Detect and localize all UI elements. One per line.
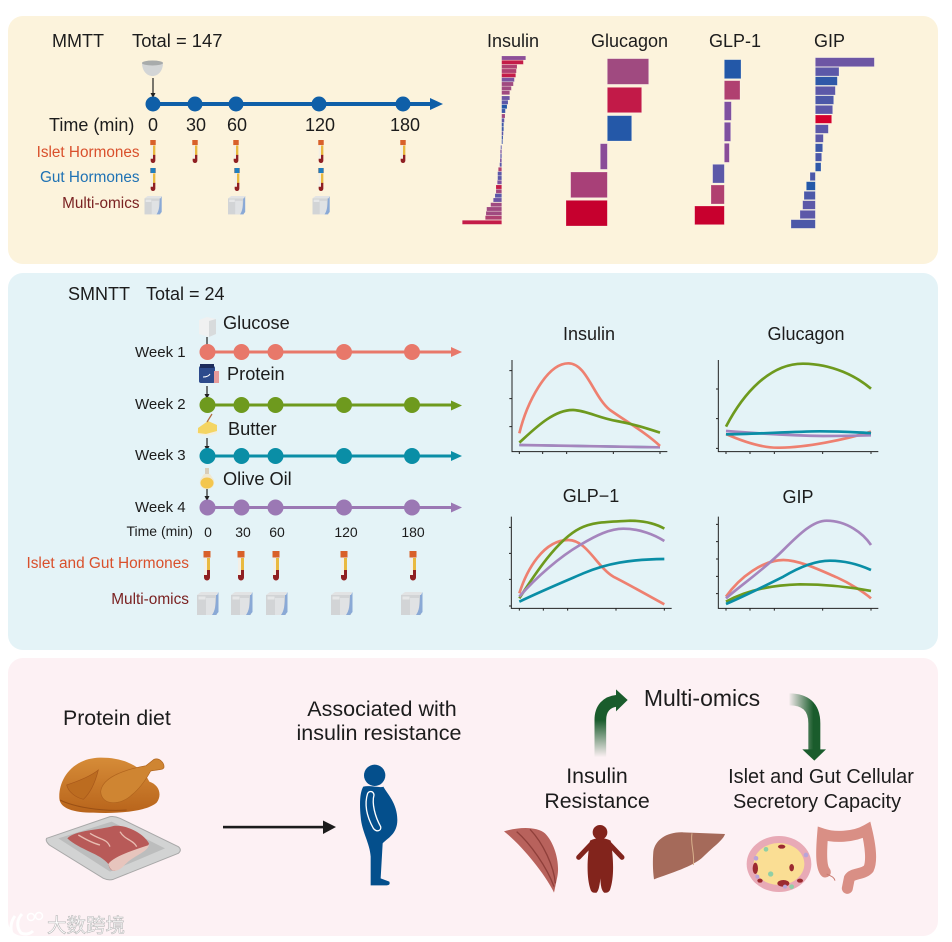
icon: liver [653, 832, 725, 879]
icon: meat tray [46, 817, 180, 880]
icon: meal bowl [142, 60, 163, 98]
blood tubes gut [150, 168, 324, 191]
label: islet and gut secretory capacity: Islet and Gut Cellular [728, 766, 914, 788]
row labels: Islet Hormones [37, 144, 140, 161]
heading: protein diet: Protein diet [63, 706, 171, 730]
bar titles: Glucagon [591, 31, 668, 51]
row labels: Gut Hormones [40, 169, 140, 186]
line chart: GIP [716, 517, 878, 611]
bar titles: GLP-1 [709, 31, 761, 51]
food labels: Butter [228, 419, 277, 439]
week labels: Week 2 [135, 396, 186, 413]
panel: conclusions [8, 658, 938, 936]
icon: muscle [504, 828, 558, 893]
row labels: Islet and Gut Hormones [26, 555, 189, 572]
panel: MMTT [8, 16, 938, 264]
heading: associated with insulin resistance: insulin resistance [297, 721, 461, 745]
icon: pancreatic islet [747, 836, 811, 892]
week labels: Week 4 [135, 499, 186, 516]
bar titles: Insulin [487, 31, 539, 51]
waterfall bars: Glucagon [566, 59, 649, 226]
food labels: Olive Oil [223, 469, 292, 489]
chart titles: GLP−1 [563, 486, 619, 506]
icon: olive oil [200, 468, 214, 501]
time labels: Time (min) [49, 115, 134, 135]
week labels [135, 344, 186, 516]
label: islet and gut secretory capacity: Secretory Capacity [733, 791, 901, 813]
week labels: Week 3 [135, 447, 186, 464]
label: insulin resistance: Insulin [566, 764, 628, 788]
line chart: Glucagon [716, 360, 878, 454]
row labels [37, 144, 140, 212]
timeline week 4 [200, 500, 462, 516]
time labels: 120 [334, 524, 358, 540]
chart titles [563, 324, 845, 507]
icon: dark red person [579, 825, 622, 893]
time labels: 180 [401, 524, 425, 540]
blood tubes [204, 551, 416, 580]
row labels: Multi-omics [111, 591, 189, 608]
waterfall bars: GIP [791, 58, 874, 228]
bar titles: GIP [814, 31, 845, 51]
time labels: Time (min) [126, 523, 193, 539]
time labels: 0 [204, 524, 212, 540]
arrow: diet to person [223, 820, 336, 834]
waterfall bars: Insulin [462, 56, 526, 224]
icon: colon [822, 830, 871, 888]
SMNTT heading: Total = 24 [146, 284, 225, 304]
SMNTT heading [68, 284, 225, 304]
time labels: 30 [235, 524, 251, 540]
icon: roast chicken [59, 758, 164, 813]
heading: associated with insulin resistance: Associated with [307, 697, 457, 721]
timeline week 3 [200, 448, 462, 464]
time labels: 0 [148, 115, 158, 135]
gut tube caps [150, 168, 324, 173]
MMTT heading: MMTT [52, 31, 104, 51]
timeline week 1 [200, 344, 462, 360]
time labels [49, 115, 420, 135]
label: multi-omics: Multi-omics [644, 685, 760, 711]
panel: SMNTT [8, 273, 938, 650]
line chart: GLP-1 [509, 517, 672, 611]
arrow: down to capacity [789, 699, 826, 761]
food labels [223, 313, 292, 489]
omics machines [144, 196, 330, 214]
heading: associated with insulin resistance [297, 697, 461, 745]
SMNTT heading: SMNTT [68, 284, 130, 304]
blood tubes islet [150, 140, 406, 163]
bar titles [487, 31, 845, 51]
chart titles: Insulin [563, 324, 615, 344]
time labels: 60 [269, 524, 285, 540]
watermark: 大数跨境 [47, 915, 125, 937]
label: insulin resistance: Resistance [544, 789, 650, 813]
watermark [11, 912, 125, 937]
chart titles: GIP [782, 487, 814, 507]
time labels: 180 [390, 115, 420, 135]
label: insulin resistance [544, 764, 650, 813]
MMTT timeline [146, 96, 443, 112]
time labels: 30 [186, 115, 206, 135]
timeline week 2 [200, 397, 462, 413]
week labels: Week 1 [135, 344, 186, 361]
chart titles: Glucagon [767, 324, 845, 344]
arrow: up to multi-omics [600, 689, 628, 757]
label: islet and gut secretory capacity [728, 766, 914, 813]
line chart: Insulin [509, 360, 667, 454]
MMTT heading [52, 30, 222, 51]
time labels: 120 [305, 115, 335, 135]
row labels [26, 555, 189, 608]
MMTT heading: Total = 147 [132, 30, 222, 51]
omics machines [197, 592, 422, 615]
food labels: Protein [227, 364, 285, 384]
icon: person with abdominal obesity [360, 765, 397, 885]
row labels: Multi-omics [62, 195, 140, 212]
time labels [126, 523, 425, 540]
waterfall bars: GLP-1 [695, 60, 741, 225]
icon: glucose cube [199, 317, 216, 350]
icon: protein jar [199, 364, 219, 399]
food labels: Glucose [223, 313, 290, 333]
icon: butter [196, 414, 218, 451]
time labels: 60 [227, 115, 247, 135]
